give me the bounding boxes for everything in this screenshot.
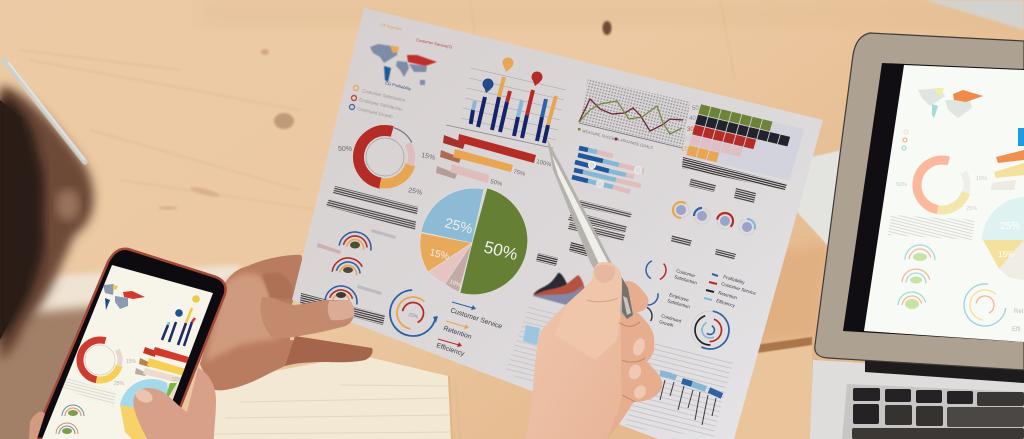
horizontal progress bars (436, 134, 536, 183)
world map (370, 44, 437, 85)
phone (33, 249, 226, 439)
index finger over pen (555, 262, 622, 360)
mini percentages: 50% (172, 377, 183, 383)
spiral legend with arrows (435, 302, 503, 358)
laptop (810, 33, 1024, 439)
block chart panel (686, 104, 804, 181)
ring charts (628, 256, 670, 330)
pie chart (420, 188, 528, 295)
pie labels: 50% (482, 237, 520, 264)
fingernails (627, 337, 648, 401)
metrics legend: Profitability (723, 274, 746, 285)
line chart legend: ARGANIZE GOALS (620, 138, 654, 150)
mini horizontal bars (135, 347, 192, 383)
block chart axis numbers: 40 (689, 116, 696, 122)
pie labels (428, 214, 520, 289)
pie labels: 10% (448, 279, 462, 289)
map labels (380, 22, 453, 91)
mini percentages: 25% (114, 381, 125, 387)
pie labels: 15% (428, 247, 450, 263)
text block under donut (326, 186, 418, 230)
paper sheet with infographic (292, 8, 823, 439)
ring chart labels: Employee (669, 292, 690, 303)
faded legend markers (902, 130, 908, 150)
faded legend names (1012, 308, 1024, 331)
faded donut labels: 50% (896, 182, 907, 188)
block chart axis numbers (681, 106, 699, 153)
faded map (918, 88, 983, 118)
mini rainbow icons (56, 405, 84, 434)
block chart axis numbers: 30 (687, 127, 694, 133)
spiral legend with arrows: Customer Service (449, 307, 503, 331)
circular progress spiral: 25% (408, 312, 419, 320)
ring chart labels (659, 268, 698, 328)
area chart (533, 273, 585, 306)
faded legend names: Ret (1014, 309, 1024, 315)
fingers behind phone at lower left (29, 412, 45, 439)
open notebook (200, 355, 452, 439)
faded pie labels (998, 222, 1020, 257)
faded spiral (963, 283, 1006, 327)
faded text stripes (888, 215, 975, 240)
paper surface (292, 8, 823, 439)
legend: satisfaction and growth: Employee Satisfaction (359, 97, 404, 112)
map labels: Customer Service(2) (416, 37, 453, 50)
faded donut labels: 25% (966, 206, 977, 212)
metrics legend: Retention (718, 290, 738, 300)
donut labels: 50% (338, 146, 352, 153)
left thumb over paper (260, 297, 354, 338)
circular progress spiral (386, 286, 440, 340)
gauge captions (671, 178, 756, 260)
text blocks beside pen (568, 200, 632, 241)
hinge (865, 360, 1024, 383)
mini donut (76, 336, 122, 384)
text block at lower left of paper (300, 293, 385, 325)
block chart axis numbers: 20 (684, 137, 691, 143)
keyboard keys (852, 388, 1024, 439)
legend: satisfaction and growth (350, 86, 406, 119)
stacked horizontal bar chart (572, 148, 644, 192)
faded pie labels: 15% (998, 250, 1014, 259)
ring chart labels: Satisfaction (674, 274, 698, 286)
line chart legend (578, 128, 654, 150)
dotted line chart (579, 78, 690, 148)
mini percentages (114, 359, 183, 387)
phone display (42, 265, 213, 439)
laptop lid (815, 33, 1024, 370)
white sheet under phone (15, 265, 240, 335)
area chart captions (536, 242, 589, 266)
mini text stripes (60, 378, 116, 406)
donut labels (338, 146, 436, 197)
mini bar chart (162, 308, 199, 348)
pen resting on desk (4, 60, 85, 162)
line chart legend: MEASURE SUCCESS (582, 129, 620, 142)
donut labels: 15% (421, 152, 436, 162)
map labels: CG Profitability (385, 80, 412, 91)
lower striped histogram panels (505, 303, 733, 437)
laptop screen content (888, 88, 1024, 333)
block chart axis numbers: 10 (681, 147, 688, 153)
donut chart (347, 119, 423, 195)
block chart axis numbers: 50 (692, 106, 699, 112)
person's hair (0, 85, 94, 360)
bar chart grid (461, 68, 566, 140)
ring chart labels: Growth (659, 319, 675, 328)
hand holding phone (133, 368, 216, 439)
pie labels: 25% (443, 214, 474, 237)
map labels: CS Payment (380, 22, 404, 32)
progress bar labels: 50% (490, 179, 503, 188)
text block under block chart (682, 157, 787, 190)
rainbow captions (317, 229, 396, 295)
pin markers (482, 58, 542, 93)
mini pins (175, 295, 200, 317)
faded pie labels: 25% (1000, 221, 1020, 232)
faded donut labels: 15% (976, 176, 987, 182)
legend: satisfaction and growth: Customer Satisfaction (362, 88, 406, 103)
faded pie (982, 197, 1024, 280)
person's sleeve (0, 305, 115, 439)
ring chart labels: Satisfaction (667, 298, 691, 310)
progress bar labels: 100% (536, 159, 553, 169)
histogram bars (660, 373, 722, 425)
faded donut labels (896, 176, 987, 212)
small circular gauges (673, 202, 755, 235)
screen bezel (843, 63, 1024, 342)
sheet behind laptop (797, 150, 842, 248)
mini pie (120, 379, 180, 439)
keyboard base (810, 360, 1024, 439)
spiral legend with arrows: Efficiency (435, 342, 466, 358)
pen in hand (547, 139, 634, 319)
mini percentages: 15% (126, 359, 137, 365)
brown book edge (755, 337, 812, 353)
rainbow arc icons (322, 229, 374, 321)
metrics legend: Customer Service (721, 281, 757, 296)
blurred object top right (925, 0, 1024, 30)
faded rainbow icons (897, 244, 936, 309)
phone screen content (56, 284, 200, 439)
left hand: palm and fingers behind paper (200, 255, 373, 390)
spiral legend with arrows: Retention (442, 325, 472, 341)
faded bars (991, 128, 1024, 190)
ring chart labels: Continued (661, 313, 682, 324)
mini map (103, 284, 145, 310)
laptop display (864, 65, 1024, 342)
bar chart (446, 77, 556, 148)
legend: satisfaction and growth: Continued Growth (357, 106, 394, 119)
donut labels: 25% (408, 187, 423, 197)
metrics legend (704, 274, 757, 308)
ring chart labels: Customer (676, 268, 696, 278)
faded donut (912, 156, 970, 214)
progress bar labels (490, 159, 553, 188)
concentric ring chart (688, 308, 732, 352)
progress bar labels: 75% (513, 169, 526, 178)
faded legend names: Effi (1012, 327, 1021, 333)
metrics legend: Efficiency (716, 298, 736, 308)
right hand fingers and palm (525, 280, 662, 439)
